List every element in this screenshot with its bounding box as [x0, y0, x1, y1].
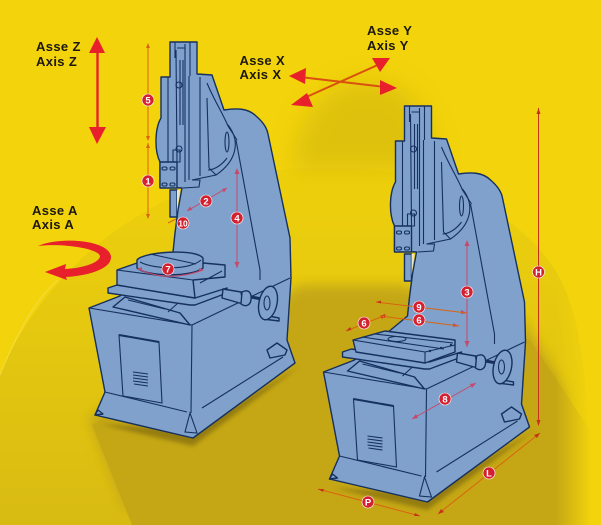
label: X axis: Axis X: [240, 67, 281, 82]
arrow: Z axis: [89, 37, 106, 144]
badge numbers: 2: [203, 196, 209, 208]
badge numbers: H: [535, 268, 542, 278]
arrow: A axis rotation: [38, 241, 111, 280]
badge numbers: [145, 96, 542, 508]
badge numbers: 3: [464, 288, 470, 298]
badge numbers: 6: [416, 316, 422, 326]
badge numbers: 4: [234, 214, 240, 224]
badge numbers: P: [365, 498, 372, 508]
badge numbers: 1: [145, 176, 151, 188]
cross slide table: [353, 331, 455, 363]
label: A axis: Axis A: [32, 217, 74, 232]
machine: left slotting machine: [89, 42, 300, 446]
arrow: Y axis: [291, 58, 390, 107]
badge numbers: 8: [442, 394, 448, 406]
label: A axis: Asse A: [32, 203, 78, 218]
badge numbers: 9: [416, 302, 422, 314]
label: Z axis: Axis Z: [36, 54, 77, 69]
label: Y axis: Asse Y: [367, 23, 412, 38]
label: Y axis: Axis Y: [367, 38, 409, 53]
badge numbers: L: [486, 468, 492, 480]
rotary table assembly: [117, 252, 225, 298]
dimension lines: right machine: [318, 108, 540, 516]
badge numbers: 10: [178, 218, 188, 228]
badge numbers: 6: [361, 318, 367, 330]
machine: right slotting machine: [324, 106, 534, 510]
arrow: X axis: [289, 68, 397, 95]
badge numbers: 5: [145, 96, 151, 106]
dimension lines: left machine: [137, 43, 240, 276]
badge numbers: 7: [165, 264, 171, 276]
label: X axis: Asse X: [240, 53, 285, 68]
label: Z axis: Asse Z: [36, 39, 81, 54]
number badges: [142, 94, 544, 508]
